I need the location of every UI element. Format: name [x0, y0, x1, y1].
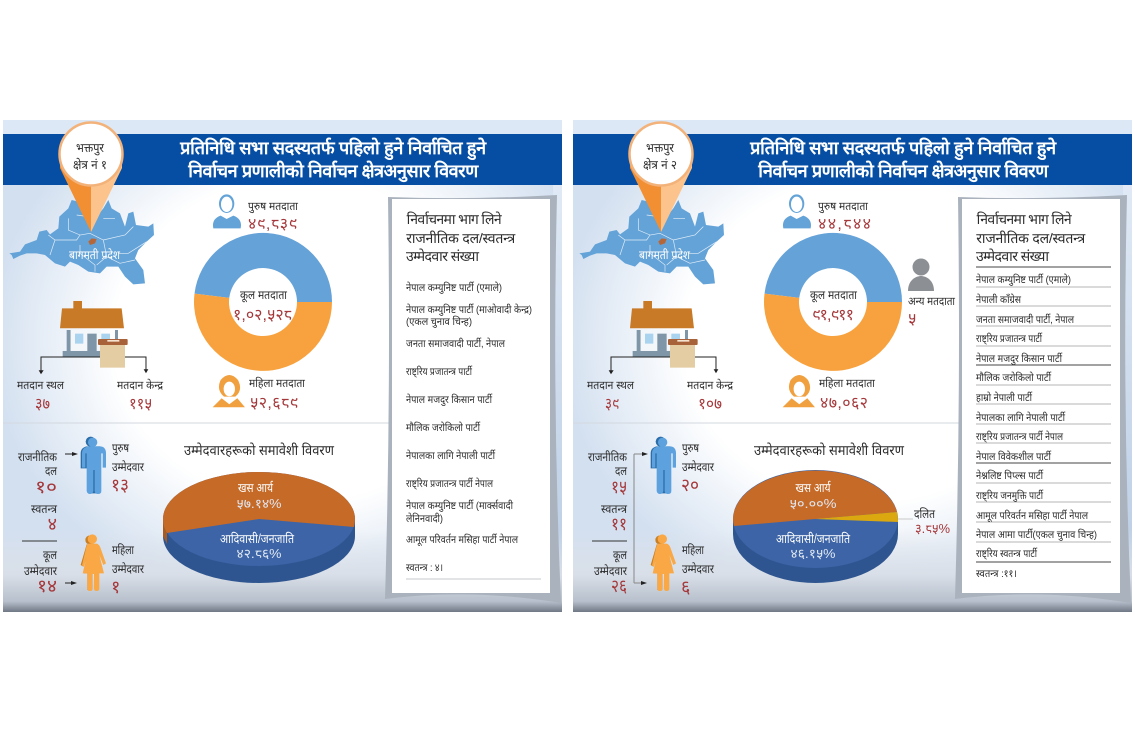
3D pie chart: ५०.००% — [790, 496, 837, 511]
party list panel: मौलिक जरोकिलो पार्टी — [976, 371, 1052, 384]
polling place count: ३७ — [35, 396, 50, 413]
female voter — [213, 375, 306, 412]
3D pie chart: आदिवासी/जनजाति — [220, 531, 295, 546]
party list panel: जनता समाजवादी पार्टी, नेपाल — [406, 337, 506, 350]
party list panel: लेनिनवादी) — [406, 512, 443, 525]
candidate counts: ४ — [48, 514, 57, 534]
female candidates: १ — [111, 577, 120, 597]
candidate counts: स्वतन्त्र — [601, 502, 627, 516]
map pin — [60, 122, 122, 232]
polling centre count — [117, 378, 164, 413]
polling place count — [587, 380, 634, 413]
male candidates: १३ — [111, 475, 129, 495]
party list panel: निर्वाचनमा भाग लिने — [977, 211, 1072, 227]
party list panel: नेपाली काँग्रेस — [976, 293, 1022, 306]
map of Nepal: बागमती प्रदेश — [639, 248, 691, 262]
party list panel: मौलिक जरोकिलो पार्टी — [406, 421, 481, 434]
female voter — [783, 375, 876, 412]
party list panel: नेपाल कम्युनिष्ट पार्टी (माओवादी केन्द्र) — [406, 303, 532, 316]
candidate counts: दल — [615, 464, 628, 478]
3D pie chart: ४६.१५% — [790, 546, 836, 561]
title banner: निर्वाचन प्रणालीको निर्वाचन क्षेत्रअनुसार विवरण — [757, 160, 1049, 183]
party list panel: राजनीतिक दल/स्वतन्त्र — [976, 230, 1085, 246]
panel: constituency 1 — [3, 120, 562, 612]
male candidates: उम्मेदवार — [112, 460, 145, 474]
female candidates: उम्मेदवार — [112, 562, 145, 576]
dalit callout: दलित — [914, 507, 936, 521]
map of Nepal — [579, 200, 724, 284]
polling place count: मतदान स्थल — [587, 380, 634, 392]
dalit callout: ३.८५% — [915, 521, 950, 536]
party list panel: (एकल चुनाव चिन्ह) — [406, 315, 472, 328]
3D pie chart: ५७.१४% — [236, 496, 282, 511]
donut chart: total voters — [764, 233, 902, 371]
party list panel — [385, 195, 561, 603]
other voters: ५ — [908, 311, 916, 328]
3D pie chart: आदिवासी/जनजाति — [776, 531, 851, 546]
pie heading: उम्मेदवारहरूको समावेशी विवरण — [184, 442, 335, 458]
candidate counts: राजनीतिक — [588, 450, 628, 464]
donut chart: total voters: कूल मतदाता — [240, 288, 288, 303]
polling centre count: मतदान केन्द्र — [687, 378, 734, 392]
male candidates — [81, 437, 145, 495]
party list panel: राष्ट्रिय प्रजातन्त्र पार्टी नेपाल — [406, 477, 494, 490]
polling centre count — [687, 378, 734, 413]
polling centre count: १०७ — [698, 396, 722, 413]
male voter: ४४,८४४ — [818, 216, 871, 233]
male candidates: पुरुष — [682, 441, 700, 456]
map pin: भक्तपुर — [76, 141, 105, 156]
polling place count — [17, 380, 64, 413]
female candidates — [651, 534, 715, 597]
donut chart: total voters — [194, 233, 332, 371]
female voter: ५२,६८९ — [250, 395, 298, 412]
candidate counts: ११ — [611, 514, 627, 534]
female candidates — [81, 534, 145, 597]
dalit callout — [898, 507, 950, 536]
polling place count: ३९ — [605, 396, 619, 413]
panel background — [3, 120, 562, 612]
candidate counts: उम्मेदवार — [24, 564, 58, 578]
donut chart: total voters: १,०२,५२८ — [233, 307, 292, 324]
polling centre count: मतदान केन्द्र — [117, 378, 164, 392]
female candidates: उम्मेदवार — [682, 562, 715, 576]
pie heading: उम्मेदवारहरूको समावेशी विवरण — [754, 442, 905, 458]
male voter: पुरुष मतदाता — [248, 201, 299, 214]
male candidates — [651, 437, 715, 495]
party list panel: नेपाल मजदुर किसान पार्टी — [976, 352, 1063, 366]
candidate counts: १५ — [611, 477, 627, 497]
party list panel: राष्ट्रिय प्रजातन्त्र पार्टी — [976, 332, 1043, 345]
party list panel: नेपालका लागि नेपाली पार्टी — [976, 411, 1066, 424]
candidate counts — [588, 450, 648, 596]
3D pie chart: खस आर्य — [796, 480, 831, 495]
candidate counts: राजनीतिक — [18, 450, 58, 464]
female voter: ४७,०६२ — [820, 395, 868, 412]
candidate counts: २६ — [611, 576, 627, 596]
other voters: अन्य मतदाता — [908, 296, 956, 308]
party list panel: हाम्रो नेपाली पार्टी — [976, 391, 1033, 404]
party list panel: नेपाल कम्युनिष्ट पार्टी (एमाले) — [406, 281, 502, 294]
candidate counts: १० — [35, 477, 57, 497]
party list panel: नेपाल आमा पार्टी(एकल चुनाव चिन्ह) — [976, 528, 1097, 541]
male voter: पुरुष मतदाता — [818, 201, 869, 214]
party list panel: उम्मेदवार संख्या — [976, 248, 1049, 264]
party list panel: निर्वाचनमा भाग लिने — [407, 211, 502, 227]
candidate counts: दल — [45, 464, 58, 478]
party list panel: स्वतन्त्र :११। — [976, 568, 1017, 580]
donut chart: total voters: ९१,९११ — [812, 307, 854, 324]
map pin: भक्तपुर — [646, 141, 675, 156]
party list panel: आमूल परिवर्तन मसिहा पार्टी नेपाल — [976, 509, 1089, 522]
male voter — [213, 194, 299, 233]
candidate counts: कूल — [43, 548, 58, 563]
male candidates: उम्मेदवार — [682, 460, 715, 474]
party list panel: आमूल परिवर्तन मसिहा पार्टी नेपाल — [406, 533, 519, 546]
candidate counts: उम्मेदवार — [594, 564, 628, 578]
polling place count: मतदान स्थल — [17, 380, 64, 392]
map pin — [630, 122, 692, 232]
party list panel: स्वतन्त्र : ४। — [406, 562, 443, 574]
title banner — [573, 134, 1132, 185]
3D pie chart — [163, 472, 355, 583]
title banner: प्रतिनिधि सभा सदस्यतर्फ पहिलो हुने निर्वाचित हुने — [179, 137, 487, 161]
panel: constituency 2 — [573, 120, 1132, 612]
party list panel: राष्ट्रिय जनमुक्ति पार्टी — [976, 489, 1044, 502]
party list panel: नेपाल विवेकशील पार्टी — [976, 450, 1052, 463]
party list panel: जनता समाजवादी पार्टी, नेपाल — [976, 313, 1075, 326]
map pin: क्षेत्र नं २ — [643, 157, 677, 172]
male voter — [783, 194, 871, 233]
map of Nepal: बागमती प्रदेश — [69, 248, 121, 262]
male voter: ४९,८३९ — [248, 216, 297, 233]
candidate counts: १४ — [37, 576, 57, 596]
party list panel: नेपालका लागि नेपाली पार्टी — [406, 449, 496, 462]
party list panel: राजनीतिक दल/स्वतन्त्र — [406, 230, 515, 246]
male candidates: २० — [681, 475, 699, 495]
polling station illustration — [609, 301, 718, 374]
other voters — [908, 258, 956, 328]
polling station illustration — [39, 301, 148, 374]
party list panel: नेश्नलिष्ट पिप्ल्स पार्टी — [976, 469, 1044, 482]
female voter: महिला मतदाता — [819, 376, 876, 390]
party list panel: राष्ट्रिय स्वतन्त्र पार्टी — [976, 547, 1038, 560]
party list panel — [955, 195, 1131, 603]
3D pie chart: खस आर्य — [238, 480, 274, 495]
male candidates: पुरुष — [112, 441, 130, 456]
map pin: क्षेत्र नं १ — [73, 157, 107, 172]
candidate counts — [18, 450, 78, 596]
party list panel: नेपाल कम्युनिष्ट पार्टी (एमाले) — [976, 273, 1071, 286]
party list panel: नेपाल कम्युनिष्ट पार्टी (मार्क्सवादी — [406, 499, 513, 512]
female candidates: महिला — [682, 543, 705, 557]
polling centre count: ११५ — [129, 396, 152, 413]
party list panel: राष्ट्रिय प्रजातन्त्र पार्टी — [406, 365, 473, 378]
3D pie chart: ४२.८६% — [236, 546, 282, 561]
party list panel: उम्मेदवार संख्या — [406, 248, 479, 264]
3D pie chart — [733, 470, 898, 583]
title banner — [3, 134, 562, 185]
candidate counts: स्वतन्त्र — [31, 502, 57, 516]
donut chart: total voters: कूल मतदाता — [810, 288, 858, 303]
panel background — [573, 120, 1132, 612]
party list panel: नेपाल मजदुर किसान पार्टी — [406, 393, 493, 407]
title banner: प्रतिनिधि सभा सदस्यतर्फ पहिलो हुने निर्वाचित हुने — [749, 137, 1057, 161]
candidate counts: कूल — [613, 548, 628, 563]
female candidates: ६ — [681, 577, 690, 597]
party list panel: राष्ट्रिय प्रजातन्त्र पार्टी नेपाल — [976, 430, 1064, 443]
female voter: महिला मतदाता — [249, 376, 306, 390]
title banner: निर्वाचन प्रणालीको निर्वाचन क्षेत्रअनुसार विवरण — [187, 160, 479, 183]
map of Nepal — [9, 200, 154, 284]
female candidates: महिला — [112, 543, 135, 557]
